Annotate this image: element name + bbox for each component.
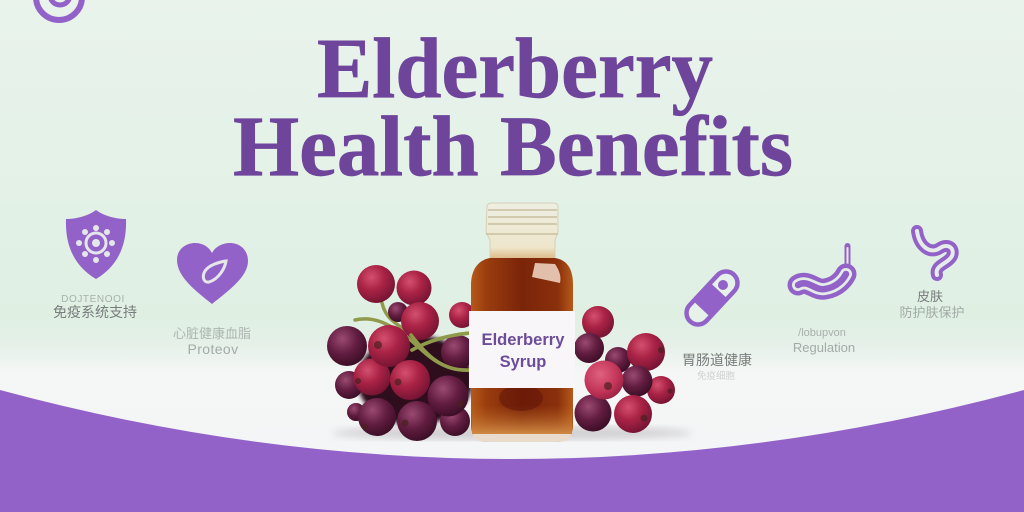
bottle label: Elderberry <box>482 331 565 349</box>
stems <box>355 303 470 370</box>
icon: skin ribbon <box>917 231 953 275</box>
icon: heart with drop <box>177 243 248 304</box>
bottle label: Syrup <box>500 353 546 371</box>
glass neck <box>486 203 558 262</box>
purple curved band <box>0 390 1024 512</box>
icon: shield with virus <box>66 210 126 279</box>
icon: stomach tube <box>798 246 848 289</box>
right berry cluster <box>574 306 675 433</box>
caption: 免疫系统支持 <box>53 304 137 320</box>
title: Elderberry <box>317 20 713 116</box>
calyx marks <box>355 341 464 430</box>
syrup bottle <box>469 203 575 442</box>
bottle label <box>469 311 575 388</box>
stem over berries <box>411 333 470 370</box>
icon: top-left spiral logo <box>36 0 82 20</box>
caption: Proteov <box>187 341 239 357</box>
calyx marks <box>604 347 672 422</box>
benefit: skin <box>899 231 965 320</box>
caption <box>793 327 855 355</box>
caption: 胃肠道健康 <box>682 352 752 368</box>
left berry cluster <box>327 265 475 441</box>
caption: Regulation <box>793 340 855 355</box>
icon: capsule <box>682 267 742 329</box>
caption <box>899 289 965 320</box>
caption: 心脏健康血脂 <box>173 326 251 341</box>
caption: 皮肤 <box>917 289 943 304</box>
caption: 免疫细胞 <box>697 370 735 382</box>
caption: /lobupvon <box>798 327 846 339</box>
benefit: gut health <box>682 267 752 382</box>
platform shadow <box>332 426 692 440</box>
caption: 防护肤保护 <box>899 305 965 320</box>
benefit: respiration <box>793 246 855 355</box>
dark mass behind berries <box>357 335 473 425</box>
caption <box>173 326 251 357</box>
liquid and glass body <box>471 258 573 442</box>
caption <box>682 352 752 382</box>
caption <box>53 294 137 320</box>
caption: DOJTENOOI <box>61 294 125 305</box>
benefit: heart health <box>173 243 251 357</box>
title: Health Benefits <box>233 98 793 194</box>
title <box>233 20 793 194</box>
benefit: immune system support <box>53 210 137 320</box>
